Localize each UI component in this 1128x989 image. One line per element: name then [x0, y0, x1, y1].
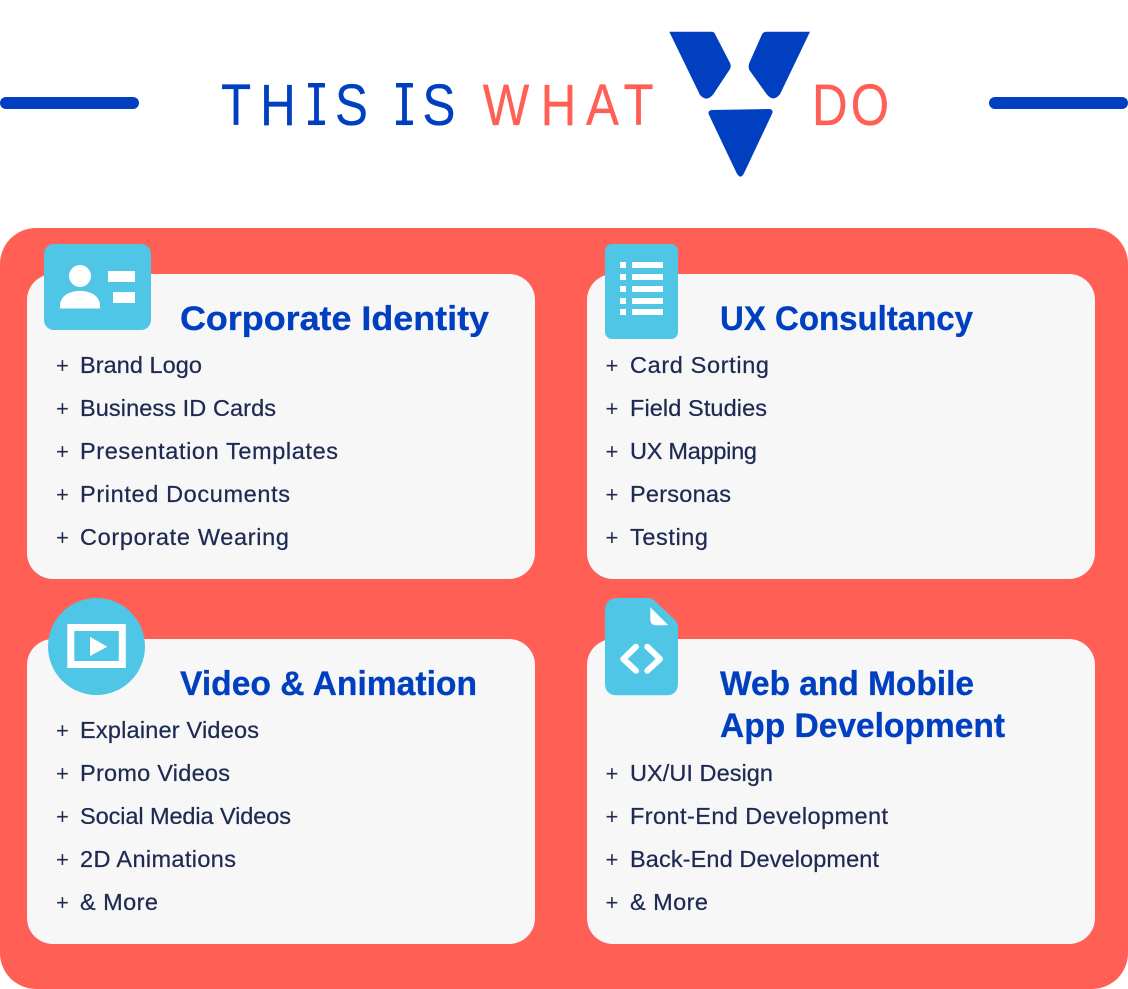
list: corporate identity: +: [56, 482, 69, 507]
icon: video player: [48, 598, 145, 695]
list: corporate identity: Brand Logo: [80, 352, 202, 378]
heading: corporate identity: Corporate Identity: [180, 300, 489, 338]
icon: code file: [605, 598, 678, 695]
list: ux consultancy: [606, 352, 769, 550]
list: ux consultancy: Card Sorting: [630, 352, 769, 378]
heading: video and animation: Video & Animation: [180, 665, 477, 703]
list: web and mobile app development: +: [606, 761, 618, 786]
icon: id card: [44, 244, 151, 330]
list: corporate identity: +: [56, 353, 69, 378]
title: DO: [812, 73, 889, 138]
list: video and animation: & More: [80, 889, 158, 915]
title: [221, 73, 889, 138]
list: video and animation: [56, 717, 291, 915]
list: video and animation: Explainer Videos: [80, 717, 259, 743]
list: corporate identity: +: [56, 525, 69, 550]
list: corporate identity: +: [56, 396, 69, 421]
list: web and mobile app development: & More: [630, 889, 708, 915]
heading: ux consultancy: UX Consultancy: [720, 300, 973, 338]
right header bar: [989, 97, 1128, 109]
icon: V logo: [669, 32, 810, 177]
list: web and mobile app development: Front-End Development: [630, 803, 888, 829]
list: ux consultancy: Testing: [630, 524, 708, 550]
list: video and animation: +: [56, 847, 69, 872]
list: corporate identity: Presentation Templates: [80, 438, 338, 464]
heading: web and mobile app development: [720, 665, 1005, 745]
list: web and mobile app development: UX/UI Design: [630, 760, 773, 786]
list: ux consultancy: Field Studies: [630, 395, 767, 421]
title: THIS IS: [221, 73, 455, 138]
list: video and animation: +: [56, 890, 69, 915]
list: video and animation: 2D Animations: [80, 846, 236, 872]
list: corporate identity: [56, 352, 338, 550]
list: web and mobile app development: +: [606, 847, 618, 872]
list: ux consultancy: +: [606, 396, 618, 421]
panel: ux consultancy: [587, 244, 1095, 579]
list: corporate identity: Corporate Wearing: [80, 524, 289, 550]
list: ux consultancy: +: [606, 353, 618, 378]
list: ux consultancy: +: [606, 525, 618, 550]
list: ux consultancy: UX Mapping: [630, 438, 757, 464]
title: WHAT: [483, 73, 654, 138]
list: video and animation: +: [56, 761, 69, 786]
panel: corporate identity: [27, 244, 535, 579]
list: corporate identity: Printed Documents: [80, 481, 290, 507]
panel: video and animation: [27, 598, 535, 944]
main coral panel: [0, 228, 1128, 989]
left header bar: [0, 97, 139, 109]
list: video and animation: Promo Videos: [80, 760, 230, 786]
list: web and mobile app development: +: [606, 890, 618, 915]
list: web and mobile app development: +: [606, 804, 618, 829]
list: video and animation: Social Media Videos: [80, 803, 291, 829]
list: ux consultancy: +: [606, 439, 618, 464]
panel: web and mobile app development: [587, 598, 1095, 944]
list: corporate identity: +: [56, 439, 69, 464]
heading: web and mobile app development: Web and Mobile: [720, 665, 974, 703]
list: corporate identity: Business ID Cards: [80, 395, 276, 421]
list: ux consultancy: +: [606, 482, 618, 507]
list: ux consultancy: Personas: [630, 481, 731, 507]
list: web and mobile app development: [606, 760, 888, 915]
icon: document list: [605, 244, 678, 339]
list: video and animation: +: [56, 718, 69, 743]
list: web and mobile app development: Back-End Development: [630, 846, 879, 872]
heading: web and mobile app development: App Development: [720, 707, 1005, 745]
list: video and animation: +: [56, 804, 69, 829]
